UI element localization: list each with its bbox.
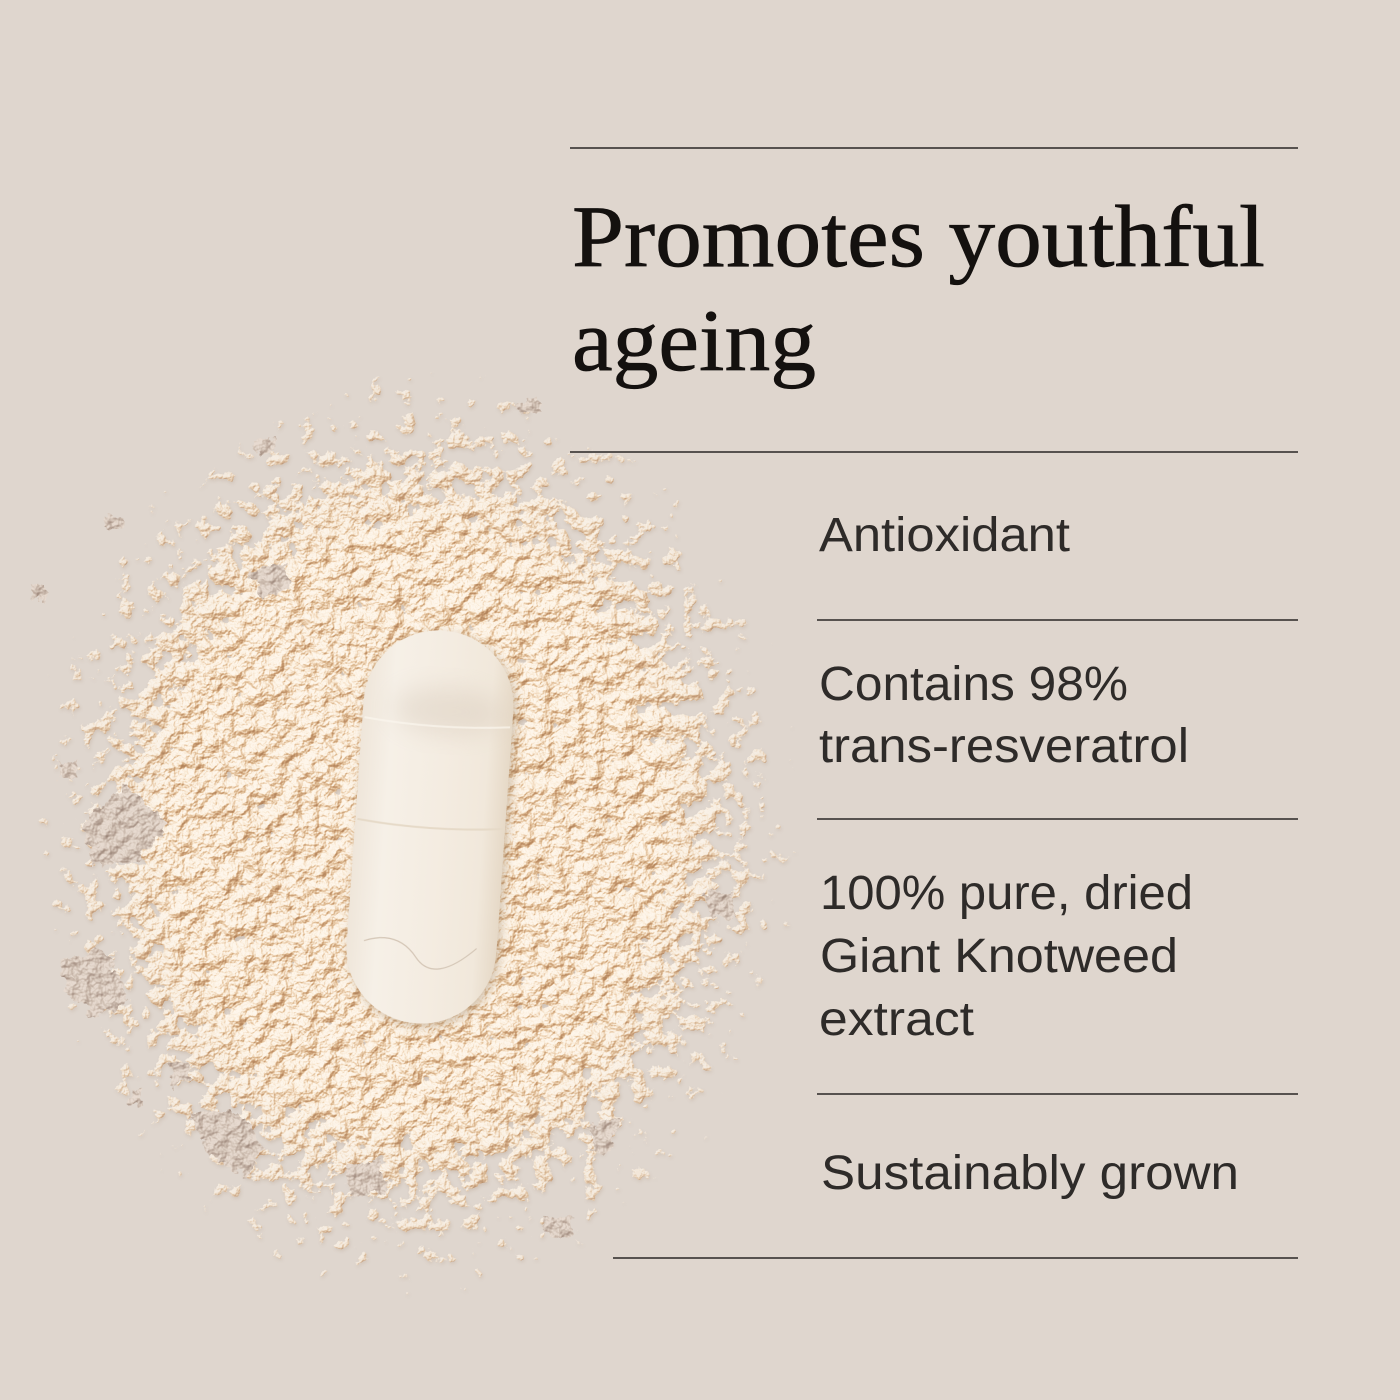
title: Promotes youthful xyxy=(572,189,1265,286)
bottom rule xyxy=(613,1257,1298,1259)
powder pile with scattered crumbs xyxy=(0,340,820,1340)
capsule cap edge xyxy=(364,717,510,731)
benefit: trans-resveratrol xyxy=(819,658,1189,773)
capsule cracks xyxy=(362,936,477,972)
benefit: trans-resveratrol: Contains 98% xyxy=(819,658,1128,711)
capsule seam xyxy=(357,819,503,833)
benefit: knotweed extract: extract xyxy=(819,993,974,1046)
title: ageing xyxy=(572,293,816,390)
rule xyxy=(817,818,1298,820)
benefit: knotweed extract xyxy=(819,867,1193,1046)
rule xyxy=(817,619,1298,621)
rule xyxy=(817,1093,1298,1095)
benefit: sustainably grown: Sustainably grown xyxy=(821,1147,1239,1200)
benefit: knotweed extract: 100% pure, dried xyxy=(820,867,1193,920)
title xyxy=(572,189,1265,390)
benefit: trans-resveratrol: trans-resveratrol xyxy=(819,720,1189,773)
large powder chunks xyxy=(30,396,734,1238)
benefit: antioxidant: Antioxidant xyxy=(819,509,1070,562)
benefit: knotweed extract: Giant Knotweed xyxy=(820,930,1178,983)
capsule inner shading xyxy=(392,683,505,739)
capsule xyxy=(341,625,519,1029)
title rule xyxy=(570,451,1298,453)
top rule xyxy=(570,147,1298,149)
